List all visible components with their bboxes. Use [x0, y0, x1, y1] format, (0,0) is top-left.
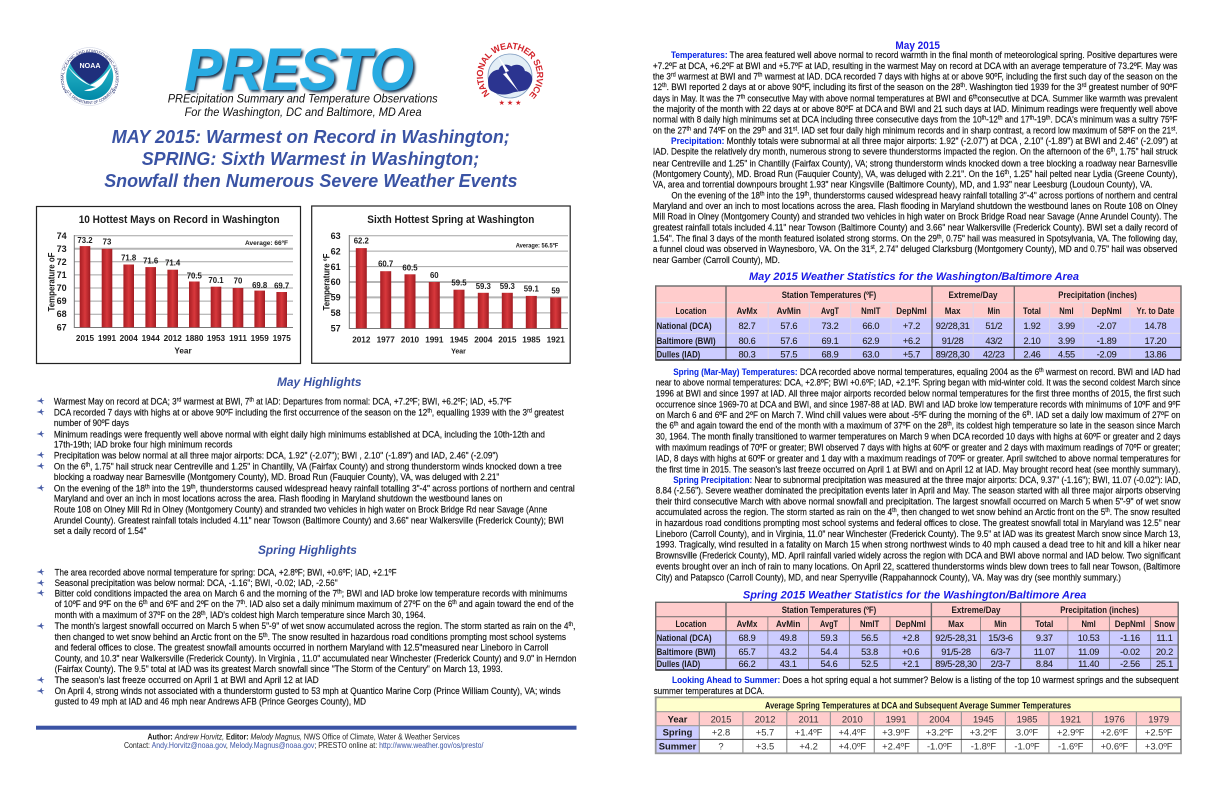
table: May 2015 weather statistics: 57.5: [780, 350, 797, 360]
table: spring and summer temperature comparison: Summer: [659, 740, 697, 751]
chart: 10 hottest Mays on record in Washington: 74: [57, 231, 67, 241]
chart: sixth hottest spring at Washington: Year: [451, 348, 466, 356]
table: May 2015 weather statistics: 2.10: [1024, 336, 1041, 346]
chart: sixth hottest spring at Washington: 1977: [377, 335, 395, 344]
list: May highlights: Route 108 on Olney Mill Rd in Olney (Montgomery County) and stranded two vehicles in high water on Brock Bridge Rd near Savage (Anne: [54, 504, 547, 515]
list: May highlights: Minimum readings were frequently well above normal with eight daily high minimums established at DCA, including the 10th-12th and: [54, 429, 545, 440]
table: Spring 2015 weather statistics: Total: [1035, 618, 1053, 629]
table: May 2015 weather statistics: Total: [1023, 305, 1041, 316]
list: Spring highlights: Bitter cold conditions impacted the area on March 6 and the morning of the 7th; BWI and IAD broke low temperature records with minimums: [55, 588, 567, 599]
table: spring and summer temperature comparison: +3.2ºF: [926, 727, 954, 738]
subtitle: program name: [168, 92, 438, 119]
chart: sixth hottest spring at Washington: Temperature ºF: [322, 253, 332, 310]
table: May 2015 weather statistics: 80.3: [739, 350, 756, 360]
list: May highlights: [36, 396, 575, 537]
list: Spring highlights: then changed to wet snow behind an Arctic front on the 5th. The snow resulted in hazardous road conditions prompting most school systems: [55, 632, 566, 643]
text block: spring temperatures: [655, 367, 1181, 475]
table: Spring 2015 weather statistics: 9.37: [1036, 633, 1053, 643]
table: May 2015 weather statistics: Precipitation (inches): [1058, 289, 1137, 300]
table: May 2015 weather statistics: Baltimore (BWI): [657, 335, 716, 346]
chart: 10 hottest Mays on record in Washington: 68: [57, 309, 67, 319]
table: Spring 2015 weather statistics: 43.1: [780, 659, 797, 669]
text block: looking ahead to summer: Looking Ahead to Summer: Does a hot spring equal a hot summer? Below is a listing of the top 10 warmest springs and the subsequent: [672, 675, 1179, 686]
table: spring and summer temperature comparison: -1.6ºF: [1058, 740, 1084, 751]
table: spring and summer temperature comparison: +2.8: [712, 727, 730, 738]
icon: NOAA logo: [60, 47, 119, 106]
table: May 2015 weather statistics: Extreme/Day: [948, 289, 998, 300]
list: May highlights: Precipitation was below normal at all three major airports: DCA, 1.92" (-2.07"); BWI , 2.10" (-1.89") and IAD, 2.46" (-2.09"): [54, 450, 498, 461]
icon: NOAA logo: NOAA: [80, 61, 101, 70]
text block: May temperatures: 12th. BWI reported 2 days at or above 90ºF, including its first of the season on the 28th. Washington tied 1939 for the 3rd greatest number of 90ºF: [653, 82, 1178, 93]
text block: spring temperatures: Spring (Mar-May) Temperatures: DCA recorded above normal temperatures, equaling 2004 as the 6th warmest on record. BWI and IAD had: [673, 367, 1180, 378]
chart: 10 hottest Mays on record in Washington: Temperature oF: [46, 252, 56, 312]
table: May 2015 weather statistics: 82.7: [739, 321, 756, 331]
table: Spring 2015 weather statistics: 6/3-7: [991, 647, 1010, 657]
table: May 2015 weather statistics: National (DCA): [657, 320, 712, 331]
table: May 2015 weather statistics: 3.99: [1058, 321, 1075, 331]
chart: sixth hottest spring at Washington: 59: [331, 293, 341, 303]
chart: 10 hottest Mays on record in Washington: 73: [103, 238, 112, 247]
table: Spring 2015 weather statistics: 11.40: [1078, 659, 1099, 669]
table: May 2015 weather statistics: AvMx: [737, 305, 758, 316]
table: Spring 2015 weather statistics: 10.53: [1078, 633, 1100, 643]
chart: 10 hottest Mays on record in Washington: 73: [57, 244, 67, 254]
text block: spring precipitation: accumulated across the region. The storm started as rain on the 4th, then changed to wet snow behind an Arctic front on the 5th. The snow resulted: [656, 507, 1180, 518]
text block: spring precipitation: City) and Patapsco (Carroll County), MD, and near Sperryville (Rappahannock County), VA. May was dry (see monthly summary.): [656, 573, 1121, 584]
table: Spring 2015 weather statistics: National (DCA): [657, 632, 712, 643]
chart: 10 hottest Mays on record in Washington: 1975: [273, 334, 291, 343]
chart: 10 hottest Mays on record in Washington: 70.5: [187, 271, 203, 280]
list: Spring highlights: month with a maximum of 37ºF on the 28th, IAD's coldest high March temperature since March 30, 1964.: [55, 610, 426, 621]
table: May 2015 weather statistics: [656, 286, 1181, 360]
table: May 2015 weather statistics: DepNml: [896, 305, 927, 316]
table: May 2015 weather statistics: 91/28: [942, 336, 964, 346]
chart: sixth hottest spring at Washington: 60: [331, 277, 341, 287]
table: May 2015 weather statistics: Yr. to Date: [1137, 305, 1174, 316]
chart: sixth hottest spring at Washington: 2010: [401, 335, 420, 344]
table: spring and summer temperature comparison: -1.0ºF: [1014, 740, 1040, 751]
chart: sixth hottest spring at Washington: 59.1: [524, 285, 540, 294]
text block: looking ahead to summer: summer temperatures at DCA.: [654, 686, 764, 697]
chart: sixth hottest spring at Washington: 60: [430, 271, 439, 280]
chart: 10 hottest Mays on record in Washington: 67: [57, 322, 67, 332]
list: May highlights: Maryland and over an inch in most locations across the area. Flash flooding in Maryland shutdown the westbound lanes on: [54, 493, 503, 504]
table: spring and summer temperature comparison: +5.7: [756, 727, 774, 738]
heading: May Highlights: May Highlights: [277, 375, 362, 389]
table: May 2015 weather statistics: 89/28,30: [936, 350, 970, 360]
table: spring and summer temperature comparison: +2.4ºF: [882, 740, 910, 751]
table: May 2015 weather statistics: +6.2: [903, 336, 920, 346]
list: May highlights: On the 6th, 1.75" hail struck near Centreville and 1.25" in Chantilly, VA (Fairfax County) and strong thunderstorm winds knocked down a tree: [54, 461, 562, 472]
table: Spring 2015 weather statistics: Min: [994, 618, 1007, 629]
table: Spring 2015 weather statistics: AvMin: [776, 618, 801, 629]
chart: sixth hottest spring at Washington: 63: [331, 231, 341, 241]
table: spring and summer temperature comparison: +4.2: [799, 740, 818, 751]
text block: May temperatures: normal with 8 daily high minimums set at DCA including three consecutive days from the 10th-12th and 17th-19th. DCA's minimum was a sultry 75ºF: [653, 115, 1178, 126]
heading: May 2015 statistics table title: May 2015 Weather Statistics for the Washington/Baltimore Area: [749, 271, 1079, 283]
table: spring and summer temperature comparison: [656, 697, 1181, 753]
chart: 10 hottest Mays on record in Washington: 70: [234, 277, 243, 286]
chart: 10 hottest Mays on record in Washington: 1991: [98, 334, 117, 343]
table: May 2015 weather statistics: -2.09: [1097, 350, 1117, 360]
table: May 2015 weather statistics: 17.20: [1145, 336, 1167, 346]
chart: sixth hottest spring at Washington: 1985: [522, 335, 541, 344]
table: May 2015 weather statistics: 80.6: [739, 336, 756, 346]
icon: National Weather Service logo: ★ ★ ★: [499, 99, 521, 107]
table: Spring 2015 weather statistics: -2.56: [1120, 659, 1140, 669]
chart: 10 hottest Mays on record in Washington: 69: [57, 296, 67, 306]
table: May 2015 weather statistics: 2.46: [1024, 350, 1041, 360]
table: May 2015 weather statistics: 62.9: [862, 336, 879, 346]
list: May highlights: set a daily record of 1.54": [54, 526, 146, 537]
chart: 10 hottest Mays on record in Washington: 71.4: [165, 258, 181, 267]
table: Spring 2015 weather statistics: 59.3: [821, 633, 838, 643]
table: Spring 2015 weather statistics: [656, 602, 1178, 670]
table: Spring 2015 weather statistics: 92/5-28,31: [935, 633, 977, 643]
table: spring and summer temperature comparison: Year: [668, 713, 688, 724]
table: May 2015 weather statistics: Station Temperatures (ºF): [782, 289, 876, 300]
list: Spring highlights: (Fairfax County). The 9.5" total at IAD was its greatest March snowfall since "The Storm of the Century" on March 13, 1993.: [55, 664, 503, 675]
list: Spring highlights: The month's largest snowfall occurred on March 5 when 5"-9" of wet snow accumulated across the region. The storm started as rain on the 4th,: [55, 621, 575, 632]
table: May 2015 weather statistics: 69.1: [822, 336, 839, 346]
chart: sixth hottest spring at Washington: 2012: [352, 335, 371, 344]
list: Spring highlights: On April 4, strong winds not associated with a thunderstorm gusted to 53 mph at Quantico Marine Corp (Prince William County), VA; winds: [55, 686, 561, 697]
chart: sixth hottest spring at Washington: 1945: [450, 335, 469, 344]
table: May 2015 weather statistics: 13.86: [1145, 350, 1167, 360]
table: spring and summer temperature comparison: 3.0ºF: [1016, 727, 1038, 738]
table: spring and summer temperature comparison: +4.0ºF: [838, 740, 866, 751]
table: May 2015 weather statistics: AvMin: [777, 305, 801, 316]
table: May 2015 weather statistics: +7.2: [903, 321, 920, 331]
chart: sixth hottest spring at Washington: Average: 56.5ºF: [516, 242, 558, 250]
chart: 10 hottest Mays on record in Washington: 71.6: [143, 257, 159, 266]
table: spring and summer temperature comparison: +1.4ºF: [795, 727, 823, 738]
table: spring and summer temperature comparison: +0.6ºF: [1101, 740, 1128, 751]
table: Spring 2015 weather statistics: 52.5: [861, 659, 878, 669]
table: Spring 2015 weather statistics: NmlT: [860, 618, 879, 629]
footer rule: [36, 726, 576, 730]
title: PRESTO wordmark: PRESTO: [185, 38, 414, 102]
chart: sixth hottest spring at Washington: 62.2: [354, 237, 370, 246]
text block: May precipitation: 1.54". The final 3 days of the month featured isolated strong storms. On the 29th, 0.75" hail was measured in Spotsylvania, VA. The following day,: [653, 233, 1178, 244]
table: Spring 2015 weather statistics: Precipitation (inches): [1060, 604, 1139, 615]
list: May highlights: Warmest May on record at DCA; 3rd warmest at BWI, 7th at IAD: Departures from normal: DCA, +7.2ºF; BWI, +6.2ºF; IAD, +5.7ºF: [54, 396, 512, 407]
chart: 10 hottest Mays on record in Washington: 2015: [76, 334, 95, 343]
table: May 2015 weather statistics: NmlT: [861, 305, 881, 316]
table: May 2015 weather statistics: -2.07: [1097, 321, 1117, 331]
chart: 10 hottest Mays on record in Washington: 69.7: [274, 281, 289, 290]
chart: sixth hottest spring at Washington: 62: [331, 246, 341, 256]
chart: sixth hottest spring at Washington: 59.3: [476, 282, 492, 291]
table: Spring 2015 weather statistics: 11.07: [1034, 647, 1055, 657]
table: May 2015 weather statistics: 51/2: [985, 321, 1002, 331]
table: May 2015 weather statistics: 57.6: [780, 321, 797, 331]
chart: 10 hottest Mays on record in Washington: 1911: [229, 334, 247, 343]
table: May 2015 weather statistics: 66.0: [862, 321, 879, 331]
table: Spring 2015 weather statistics: Dulles (IAD): [657, 658, 700, 669]
table: Spring 2015 weather statistics: 54.4: [821, 647, 838, 657]
table: spring and summer temperature comparison: 1979: [1148, 713, 1169, 724]
table: spring and summer temperature comparison: +4.4ºF: [838, 727, 866, 738]
table: May 2015 weather statistics: -1.89: [1097, 336, 1117, 346]
text block: May precipitation: IAD. Despite the relatively dry month, numerous strong to severe thunderstorms impacted the region. On the afternoon of the 6th, 1.75" hail struck: [653, 147, 1178, 158]
table: spring and summer temperature comparison: 1985: [1017, 713, 1037, 724]
table: Spring 2015 weather statistics: 89/5-28,30: [935, 659, 977, 669]
chart: sixth hottest spring at Washington: 58: [331, 308, 341, 318]
table: spring and summer temperature comparison: Spring: [663, 727, 693, 738]
table: May 2015 weather statistics: 73.2: [822, 321, 839, 331]
chart: 10 hottest Mays on record in Washington: 1880: [185, 334, 204, 343]
heading: May 2015: May 2015: [895, 40, 940, 52]
table: Spring 2015 weather statistics: 11.1: [1156, 633, 1173, 643]
table: Spring 2015 weather statistics: Nml: [1081, 618, 1096, 629]
table: Spring 2015 weather statistics: DepNml: [1115, 618, 1145, 629]
headline: SPRING: Sixth Warmest in Washington;: [142, 148, 479, 169]
chart: sixth hottest spring at Washington: 2004: [474, 335, 493, 344]
chart: 10 hottest Mays on record in Washington: 1959: [251, 334, 269, 343]
table: Spring 2015 weather statistics: +2.8: [902, 633, 919, 643]
icon: National Weather Service logo: NATIONAL WEATHER SERVICE: [476, 42, 544, 99]
chart: sixth hottest spring at Washington: 60.5: [402, 264, 418, 273]
chart: sixth hottest spring at Washington: 1991: [425, 335, 444, 344]
table: spring and summer temperature comparison: 1945: [973, 713, 994, 724]
table: May 2015 weather statistics: 92/28,31: [936, 321, 970, 331]
table: Spring 2015 weather statistics: 54.6: [821, 659, 838, 669]
table: spring and summer temperature comparison: +3.5: [756, 740, 774, 751]
footer credits: [124, 732, 484, 750]
table: Spring 2015 weather statistics: Station Temperatures (ºF): [782, 604, 876, 615]
heading: Spring 2015 statistics table title: Spring 2015 Weather Statistics for the Washington/Baltimore Area: [743, 590, 1086, 602]
table: Spring 2015 weather statistics: AvgT: [820, 618, 838, 629]
table: spring and summer temperature comparison: 1976: [1104, 713, 1125, 724]
headline: [104, 126, 517, 191]
table: May 2015 weather statistics: 63.0: [862, 350, 879, 360]
table: May 2015 weather statistics: AvgT: [821, 305, 839, 316]
table: Spring 2015 weather statistics: +0.6: [902, 647, 919, 657]
headline: Snowfall then Numerous Severe Weather Events: [104, 170, 517, 191]
table: May 2015 weather statistics: 43/2: [985, 336, 1002, 346]
list: Spring highlights: [36, 567, 576, 707]
table: spring and summer temperature comparison: +2.9ºF: [1057, 727, 1085, 738]
list: May highlights: On the evening of the 18th into the 19th, thunderstorms caused widespread heavy rainfall totalling 3"-4" across portions of northern and central: [54, 483, 575, 494]
table: Spring 2015 weather statistics: -0.02: [1120, 647, 1140, 657]
chart: 10 hottest Mays on record in Washington: 70: [57, 283, 67, 293]
list: Spring highlights: and federal offices to close. The greatest snowfall amounts occurred in northern Maryland with 12.5"measured near Lineboro in Carroll: [55, 643, 548, 654]
table: spring and summer temperature comparison: +2.5ºF: [1145, 727, 1173, 738]
table: Spring 2015 weather statistics: 65.7: [739, 647, 756, 657]
text block: May precipitation: VA, area and torrential downpours brought 1.93" near Kingsville (Baltimore County), MD, and 1.93" near Leesburg (Loudoun County), VA.: [653, 179, 1152, 190]
table: Spring 2015 weather statistics: +2.1: [902, 659, 919, 669]
chart: 10 hottest Mays on record in Washington: 72: [57, 257, 67, 267]
chart: 10 hottest Mays on record in Washington: [36, 206, 300, 364]
table: Spring 2015 weather statistics: Extreme/Day: [952, 604, 1001, 615]
table: May 2015 weather statistics: Nml: [1059, 305, 1074, 316]
table: spring and summer temperature comparison: -1.8ºF: [971, 740, 996, 751]
table: spring and summer temperature comparison: 1991: [886, 713, 906, 724]
text block: looking ahead to summer: [654, 675, 1179, 697]
table: Spring 2015 weather statistics: Snow: [1154, 618, 1175, 629]
table: May 2015 weather statistics: DepNml: [1091, 305, 1122, 316]
list: Spring highlights: gusted to 49 mph at IAD and 46 mph near Andrews AFB (Prince Georges County), MD: [55, 696, 366, 707]
list: May highlights: 17th-19th; IAD broke four high minimum records: [54, 439, 233, 450]
chart: 10 hottest Mays on record in Washington: 1944: [142, 334, 160, 343]
footer credits: Author: Andrew Horvitz, Editor: Melody Magnus, NWS Office of Climate, Water & Weather Services: [148, 732, 460, 742]
table: May 2015 weather statistics: Max: [945, 305, 961, 316]
table: spring and summer temperature comparison: +3.2ºF: [970, 727, 997, 738]
text block: May precipitation: a funnel cloud was observed in Waynesboro, VA. On the 31st, 2.74" deluged Clarksburg (Montgomery County), MD and 0.75" hail was observed: [653, 244, 1178, 255]
list: Spring highlights: Seasonal precipitation was below normal: DCA, -1.16"; BWI, -0.02; IAD, -2.56": [55, 578, 338, 589]
table: Spring 2015 weather statistics: 25.1: [1156, 659, 1173, 669]
table: Spring 2015 weather statistics: 2/3-7: [991, 659, 1010, 669]
text block: spring temperatures: on March 6 and 6ºF and 2ºF on March 7. Wind chill values were about -5ºF during the morning of the 6th. IAD set a daily low maximum of 27ºF on: [656, 410, 1180, 421]
table: Spring 2015 weather statistics: DepNml: [896, 618, 926, 629]
chart: sixth hottest spring at Washington: 57: [331, 324, 341, 334]
table: May 2015 weather statistics: 14.78: [1145, 321, 1167, 331]
text block: spring precipitation: [656, 475, 1181, 584]
footer credits: Contact: Andy.Horvitz@noaa.gov, Melody.Magnus@noaa.gov; PRESTO online at: http://www.weather.gov/os/presto/: [124, 740, 484, 750]
list: Spring highlights: County, and 10.3" near Walkersville (Frederick County). In Virginia , 11.0" accumulated near Winchester (Frederick County) and 9.0" in Herndon: [55, 653, 577, 664]
chart: 10 hottest Mays on record in Washington: Year: [174, 346, 192, 356]
chart: 10 hottest Mays on record in Washington: Average: 66ºF: [245, 240, 288, 247]
table: spring and summer temperature comparison: -1.0ºF: [927, 740, 953, 751]
chart: 10 hottest Mays on record in Washington: 10 Hottest Mays on Record in Washington: [79, 214, 280, 226]
icon: NOAA logo: U.S. DEPARTMENT OF COMMERCE: [67, 88, 114, 104]
table: May 2015 weather statistics: 68.9: [822, 350, 839, 360]
table: spring and summer temperature comparison: Average Spring Temperatures at DCA and Subsequent Average Summer Temperatures: [765, 699, 1071, 710]
chart: sixth hottest spring at Washington: [312, 206, 570, 363]
chart: 10 hottest Mays on record in Washington: 2012: [164, 334, 182, 343]
table: Spring 2015 weather statistics: AvMx: [737, 618, 758, 629]
chart: sixth hottest spring at Washington: 59.5: [451, 279, 467, 288]
table: May 2015 weather statistics: 3.99: [1058, 336, 1075, 346]
table: Spring 2015 weather statistics: Baltimore (BWI): [657, 646, 716, 657]
chart: sixth hottest spring at Washington: 61: [331, 262, 341, 272]
subtitle: program name: For the Washington, DC and Baltimore, MD Area: [185, 105, 422, 119]
table: spring and summer temperature comparison: +3.0ºF: [1145, 740, 1173, 751]
chart: sixth hottest spring at Washington: 59.3: [500, 282, 516, 291]
chart: 10 hottest Mays on record in Washington: 70.1: [208, 276, 224, 285]
heading: Spring Highlights: Spring Highlights: [258, 543, 357, 557]
table: spring and summer temperature comparison: 1921: [1060, 713, 1081, 724]
chart: 10 hottest Mays on record in Washington: 73.2: [77, 236, 93, 245]
table: Spring 2015 weather statistics: 11.09: [1078, 647, 1099, 657]
table: spring and summer temperature comparison: 2011: [799, 713, 819, 724]
table: Spring 2015 weather statistics: 15/3-6: [988, 633, 1013, 643]
list: Spring highlights: of 10ºF and 9ºF on the 6th and 6ºF and 2ºF on the 7th. IAD also set a daily minimum maximum of 27ºF on the 6th and again toward the end of the: [55, 599, 574, 610]
subtitle: program name: PREcipitation Summary and Temperature Observations: [168, 92, 438, 106]
chart: sixth hottest spring at Washington: 1921: [547, 335, 565, 344]
list: May highlights: DCA recorded 7 days with highs at or above 90ºF including the first occurrence of the season on the 12th, equalling 1939 with the 3rd greatest: [54, 407, 564, 418]
text block: May precipitation: near Gamber (Carroll County), MD.: [653, 255, 780, 266]
table: spring and summer temperature comparison: ?: [718, 740, 724, 751]
table: May 2015 weather statistics: 1.92: [1024, 321, 1041, 331]
chart: 10 hottest Mays on record in Washington: 71.8: [121, 253, 137, 262]
table: spring and summer temperature comparison: 2012: [755, 713, 775, 724]
list: Spring highlights: The season's last freeze occurred on April 1 at BWI and April 12 at IAD: [55, 675, 319, 686]
table: Spring 2015 weather statistics: Location: [676, 618, 707, 629]
chart: 10 hottest Mays on record in Washington: 71: [57, 270, 67, 280]
table: Spring 2015 weather statistics: -1.16: [1120, 633, 1140, 643]
table: May 2015 weather statistics: Dulles (IAD): [657, 348, 700, 360]
table: spring and summer temperature comparison: 2010: [842, 713, 863, 724]
table: Spring 2015 weather statistics: 68.9: [739, 633, 756, 643]
headline: MAY 2015: Warmest on Record in Washington;: [112, 126, 510, 147]
text block: spring temperatures: the 6th and again toward the end of the month with a maximum of 37ºF on the 28th, its coldest high temperature so late in the season since March: [656, 421, 1180, 432]
table: Spring 2015 weather statistics: 43.2: [780, 647, 797, 657]
text block: May precipitation: [653, 136, 1178, 266]
table: Spring 2015 weather statistics: 49.8: [780, 633, 797, 643]
chart: 10 hottest Mays on record in Washington: 69.8: [252, 281, 268, 290]
table: May 2015 weather statistics: Min: [988, 305, 1000, 316]
table: spring and summer temperature comparison: 2015: [711, 713, 731, 724]
list: May highlights: Arundel County). Greatest rainfall totals included 4.11" near Towson (Baltimore County) and 3.66" near Walkersville (Frederick County); BWI: [54, 516, 564, 526]
table: Spring 2015 weather statistics: 56.5: [861, 633, 878, 643]
table: Spring 2015 weather statistics: 53.8: [861, 647, 878, 657]
table: spring and summer temperature comparison: 2004: [929, 713, 950, 724]
table: May 2015 weather statistics: +5.7: [903, 350, 920, 360]
list: May highlights: blocking a roadway near Barnesville (Montgomery County), MD. Broad Run (Fauquier County), VA, was deluged with 2.21": [54, 472, 499, 483]
table: Spring 2015 weather statistics: 20.2: [1156, 647, 1173, 657]
table: May 2015 weather statistics: 42/23: [983, 350, 1005, 360]
table: May 2015 weather statistics: 57.6: [780, 336, 797, 346]
table: May 2015 weather statistics: 4.55: [1058, 350, 1075, 360]
table: spring and summer temperature comparison: +3.9ºF: [882, 727, 910, 738]
table: Spring 2015 weather statistics: Max: [948, 618, 965, 629]
chart: 10 hottest Mays on record in Washington: 2004: [120, 334, 138, 343]
text block: May precipitation: (Montgomery County), MD. Broad Run (Fauquier County), VA, was deluged with 2.21". On the 16th, 1.25" hail pelted near Lydia (Greene County),: [653, 169, 1178, 180]
chart: 10 hottest Mays on record in Washington: 1953: [207, 334, 226, 343]
table: Spring 2015 weather statistics: 66.2: [739, 659, 756, 669]
text block: May temperatures: days in May. It was the 7th consecutive May with above normal temperatures at BWI and 6thconsecutive at DCA. Summer like warmth was prevalent: [653, 93, 1178, 104]
table: Spring 2015 weather statistics: 91/5-28: [941, 647, 971, 657]
text block: May temperatures: [653, 50, 1178, 136]
chart: sixth hottest spring at Washington: 60.7: [378, 259, 393, 268]
table: spring and summer temperature comparison: +2.6ºF: [1101, 727, 1128, 738]
list: May highlights: number of 90ºF days: [54, 418, 129, 429]
chart: sixth hottest spring at Washington: 59: [551, 287, 561, 296]
chart: sixth hottest spring at Washington: 2015: [498, 335, 517, 344]
table: Spring 2015 weather statistics: 8.84: [1036, 659, 1053, 669]
table: May 2015 weather statistics: Location: [676, 305, 707, 316]
list: Spring highlights: The area recorded above normal temperature for spring: DCA, +2.8ºF; BWI, +0.6ºF; IAD, +2.1ºF: [55, 567, 397, 578]
chart: sixth hottest spring at Washington: Sixth Hottest Spring at Washington: [367, 214, 535, 226]
